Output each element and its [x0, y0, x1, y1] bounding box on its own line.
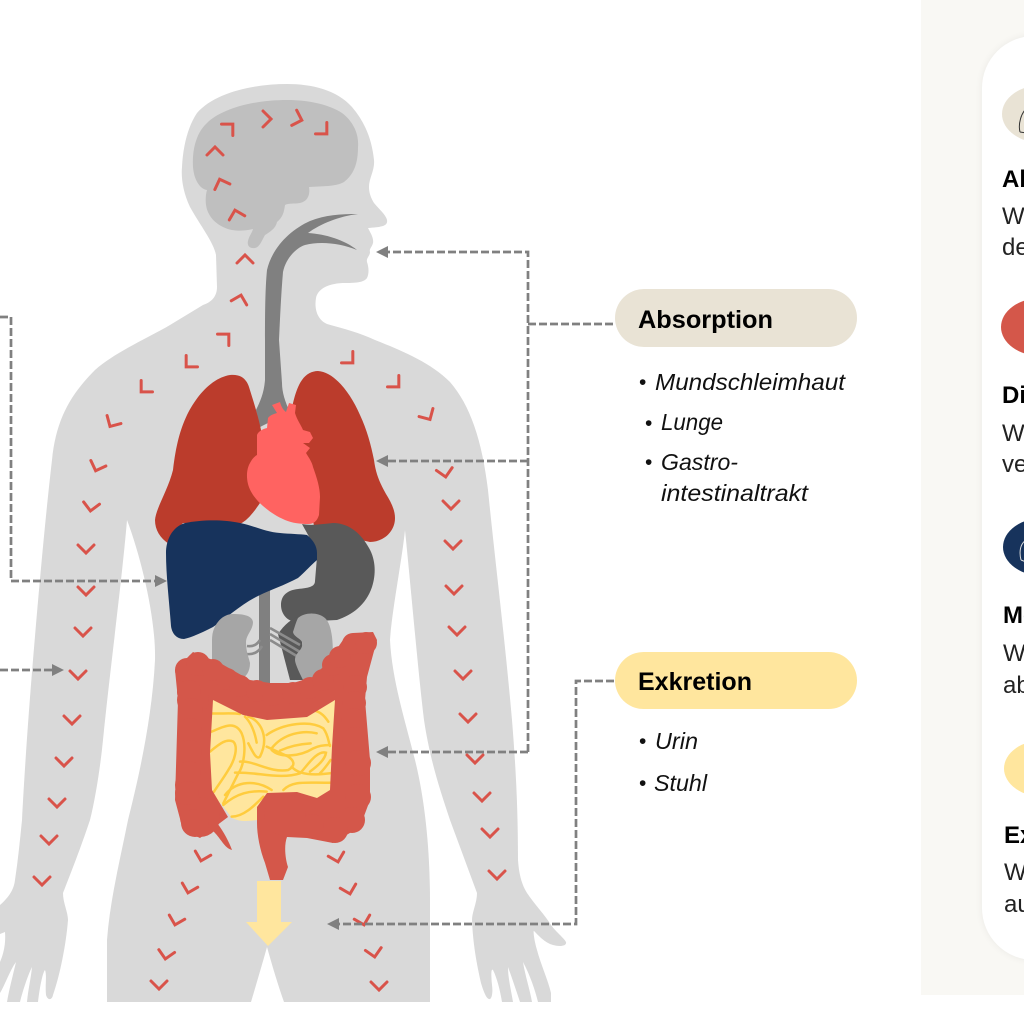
card: Distribution: [1001, 298, 1024, 478]
aorta: [259, 590, 270, 685]
panel: definitions sidebar: [921, 0, 1024, 995]
transport chevrons: [34, 110, 505, 990]
card: Metabolismus: [1003, 518, 1024, 699]
arrow: metabolism connector to liver: [0, 317, 167, 587]
stomach: [281, 523, 375, 622]
left lung: [155, 375, 262, 544]
list: excretion routes: Urin: [655, 728, 698, 754]
card: Absorption: [1002, 85, 1024, 261]
kidneys and renal vessels: [212, 614, 333, 680]
panel: Absorption label: Absorption: [638, 306, 773, 334]
large intestine: [175, 632, 377, 880]
right kidney: [293, 614, 333, 680]
arrow: excretion connector: [327, 681, 614, 930]
list: absorption sites: •: [645, 412, 652, 435]
lungs: [155, 371, 395, 544]
arrow: distribution connector to arm: [0, 664, 64, 676]
card: Absorption: W: [1002, 203, 1024, 230]
heart: [247, 402, 320, 524]
list: absorption sites: Mundschleimhaut: [655, 369, 847, 395]
list: absorption sites: [639, 369, 847, 506]
liver: [166, 520, 317, 639]
list: excretion routes: •: [639, 730, 646, 753]
list: absorption sites: intestinaltrakt: [661, 480, 810, 506]
right lung: [290, 371, 395, 542]
small intestine: [208, 698, 338, 821]
left kidney: [212, 614, 253, 680]
card: Distribution: W: [1002, 420, 1024, 447]
appendix: [212, 823, 232, 850]
panel: Exkretion label: Exkretion: [638, 668, 752, 696]
panel: Exkretion label: [615, 652, 857, 709]
excretion arrow: [246, 881, 292, 946]
list: excretion routes: Stuhl: [654, 770, 708, 796]
list: absorption sites: Gastro-: [661, 449, 738, 475]
list: absorption sites: •: [645, 451, 652, 474]
list: absorption sites: Lunge: [661, 409, 723, 435]
card: Exkretion: [1004, 740, 1024, 918]
arrows: absorption connectors: [376, 246, 613, 758]
human body silhouette: [0, 84, 566, 1002]
list: excretion routes: [639, 728, 708, 796]
trachea: [256, 214, 358, 427]
list: absorption sites: •: [639, 371, 646, 394]
panel: Absorption label: [615, 289, 857, 347]
brain: [193, 100, 358, 248]
list: excretion routes: •: [639, 772, 646, 795]
